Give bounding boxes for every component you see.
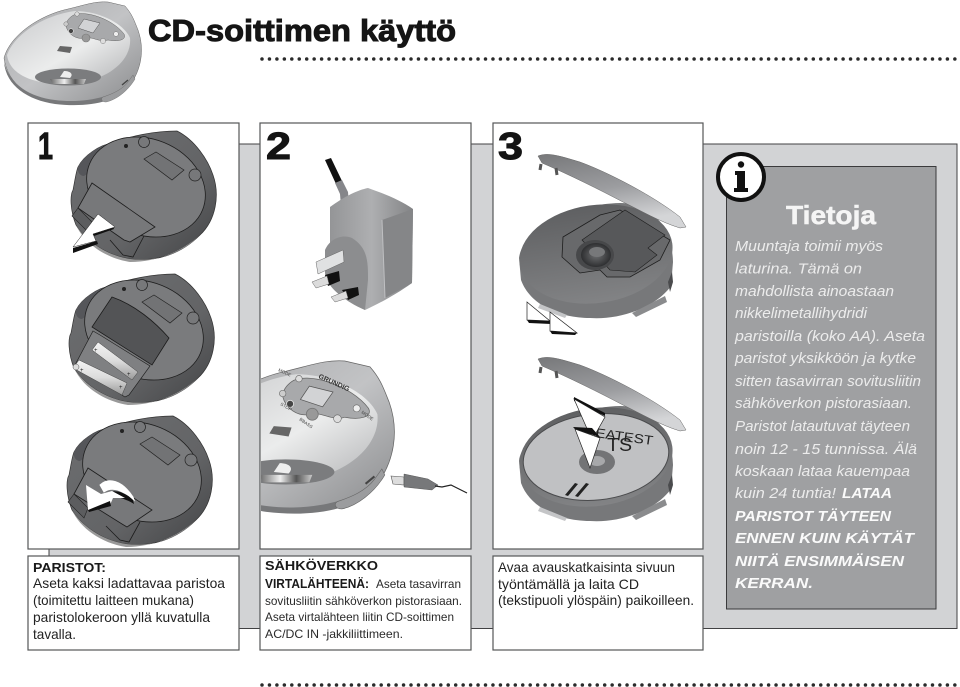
lid (538, 154, 686, 228)
information text: sitten tasavirran sovitusliitin (735, 373, 921, 390)
illustration: opened player, empty (513, 154, 686, 335)
caption text: (toimitettu laitteen mukana) (33, 592, 194, 608)
CD label text (565, 425, 654, 497)
information text: sähköverkon pistorasiaan. (735, 395, 912, 412)
caption text (33, 575, 225, 642)
illustration: opened player with CD (513, 357, 686, 521)
grey background band (49, 144, 957, 628)
icon: information (718, 154, 764, 200)
bold warning text: NIITÄ ENSIMMÄISEN (735, 553, 905, 570)
caption text: Aseta kaksi ladattavaa paristoa (33, 575, 225, 591)
panel: information (718, 154, 936, 609)
compact disc (519, 407, 673, 507)
title: CD-soittimen käyttö (148, 13, 456, 48)
illustration: closing battery door with curved arrow (67, 405, 217, 547)
illustration: inserting batteries: + (94, 348, 98, 354)
bold warning text: KERRAN. (735, 575, 813, 592)
step number 1: 1 (38, 126, 53, 168)
caption text: Avaa avauskatkaisinta sivuun (498, 559, 675, 575)
illustration: CD player with power jack (261, 360, 468, 514)
caption text: (tekstipuoli ylöspäin) paikoilleen. (498, 592, 694, 608)
information text: koskaan lataa kauempaa (735, 463, 910, 480)
panel 3 caption (493, 556, 703, 650)
control labels: STOP (280, 402, 293, 412)
bold warning text: LATAA (842, 485, 892, 502)
illustration: inserting batteries: + (119, 385, 123, 391)
caption text (498, 559, 694, 608)
information text: nikkelimetallihydridi (735, 305, 868, 322)
panel 1: battery steps (28, 120, 239, 549)
caption text: tavalla. (33, 626, 76, 642)
caption text: AC/DC IN -jakkiliittimeen. (265, 627, 403, 641)
information text: mahdollista ainoastaan (735, 283, 894, 300)
panel 3: inserting a CD (493, 123, 703, 549)
information text (734, 238, 925, 502)
caption text (265, 576, 462, 641)
illustration: inserting batteries: + (127, 372, 131, 378)
power plug and lead (391, 474, 467, 493)
caption text: Aseta tasavirran (376, 577, 461, 591)
lid (538, 357, 686, 431)
icon: curved arrow (86, 481, 134, 512)
caption text: Aseta virtalähteen liitin CD-soittimen (265, 610, 454, 624)
control labels: MODE (360, 410, 374, 422)
step number 2: 2 (266, 126, 291, 168)
control labels (278, 367, 374, 429)
information text: laturina. Tämä on (735, 260, 862, 278)
information text: Muuntaja toimii myös (735, 238, 884, 255)
illustration: inserting batteries (69, 263, 219, 405)
information text: Paristot latautuvat täyteen (735, 418, 910, 435)
control labels: BBASS (298, 417, 314, 429)
bold warning text: PARISTOT TÄYTEEN (735, 508, 892, 525)
caption text: työntämällä ja laita CD (498, 576, 639, 592)
caption text: paristolokeroon yllä kuvatulla (33, 609, 210, 625)
CD label text: EATEST (595, 425, 654, 448)
icon: white downward arrows (573, 397, 605, 468)
information text: noin 12 - 15 tunnissa. Älä (735, 441, 917, 458)
heading: Tietoja: Tietoja (786, 200, 877, 230)
panel 1 caption (28, 556, 239, 650)
step number 3: 3 (498, 126, 523, 168)
heading: PARISTOT: PARISTOT: (33, 560, 106, 575)
information text: paristot yksikköön ja kytke (734, 350, 916, 367)
illustration: CD player header (4, 2, 141, 105)
caption text: sovitusliitin sähköverkon pistorasiaan. (265, 594, 462, 608)
panel 2 caption (260, 556, 471, 650)
caption text: VIRTALÄHTEENÄ: (265, 576, 369, 591)
panel 2: mains adapter (259, 122, 472, 550)
illustration: inserting batteries: + (80, 368, 84, 374)
information text: paristoilla (koko AA). Aseta (734, 328, 925, 345)
bottom dotted rule (262, 683, 960, 687)
icon: sliding arrows (527, 302, 577, 335)
brand label: GRUNDIG (317, 373, 351, 393)
CD label text: TS (607, 435, 632, 455)
illustration: mains adapter (312, 158, 413, 310)
illustration: closed battery door with arrow (71, 120, 221, 262)
bold warning text (735, 485, 916, 592)
top dotted rule (262, 57, 960, 61)
information text: kuin 24 tuntia! (735, 485, 837, 502)
bold warning text: ENNEN KUIN KÄYTÄT (735, 530, 916, 547)
heading: mains power: SÄHKÖVERKKO (265, 558, 378, 573)
control labels: MODE (278, 367, 292, 378)
